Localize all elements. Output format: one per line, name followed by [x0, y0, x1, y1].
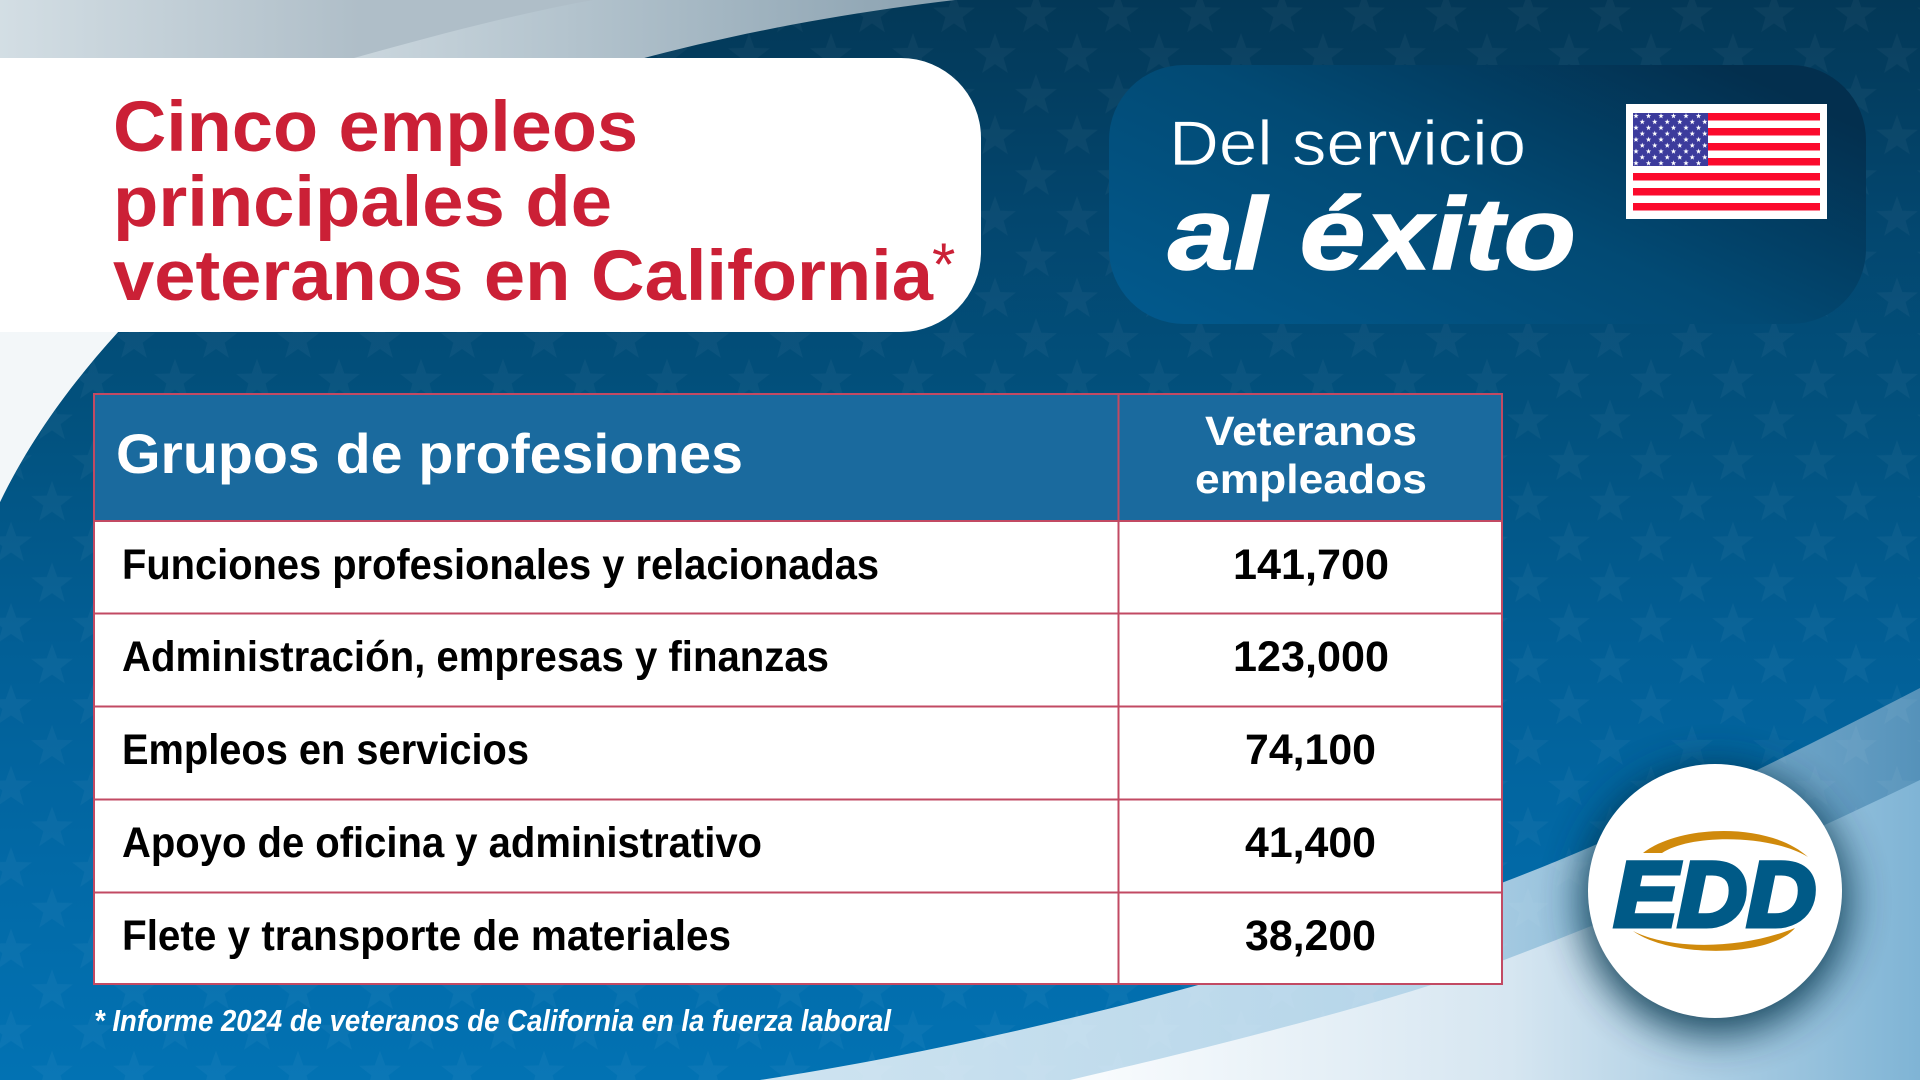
- column heading: veteranos empleados: Veteranos: [1205, 408, 1417, 454]
- row 1: 141,700: [1233, 541, 1389, 589]
- row 3: Empleos en servicios: [122, 726, 529, 774]
- table: occupational groups: [94, 394, 1502, 984]
- row 5: Flete y transporte de materiales: [122, 912, 731, 960]
- footnote: * Informe 2024 de veteranos de California en la fuerza laboral: [94, 1003, 892, 1038]
- row 3: [122, 726, 1376, 774]
- row 5: 38,200: [1245, 912, 1376, 960]
- column heading: veteranos empleados: empleados: [1195, 456, 1427, 502]
- heading: al exito: al éxito: [1168, 177, 1576, 291]
- row 4: Apoyo de oficina y administrativo: [122, 819, 762, 867]
- logo arcs: [1633, 831, 1808, 951]
- panel: del servicio al exito: [1109, 65, 1866, 324]
- heading: title text: [113, 88, 955, 316]
- row 2: Administración, empresas y finanzas: [122, 633, 829, 681]
- icon: american flag: [1626, 104, 1827, 219]
- row 2: 123,000: [1233, 633, 1389, 681]
- table header: [94, 394, 1502, 521]
- heading: title text: principales de: [113, 163, 612, 242]
- row 5: [122, 912, 1376, 960]
- panel: title: [0, 58, 981, 332]
- row 1: Funciones profesionales y relacionadas: [122, 541, 879, 589]
- row 4: 41,400: [1245, 819, 1376, 867]
- heading: del servicio: Del servicio: [1169, 109, 1526, 179]
- column heading: veteranos empleados: [1195, 408, 1427, 502]
- logo wordmark: EDD: [1614, 844, 1816, 946]
- heading: title text: Cinco empleos: [113, 88, 638, 167]
- heading: title text: *: [932, 231, 955, 298]
- logo: EDD badge: [1581, 764, 1849, 1035]
- row 2: [122, 633, 1389, 681]
- heading: title text: veteranos en California: [113, 237, 934, 316]
- row 1: [122, 541, 1389, 589]
- row 3: 74,100: [1245, 726, 1376, 774]
- row 4: [122, 819, 1376, 867]
- column heading: grupos de profesiones: Grupos de profesiones: [116, 422, 743, 485]
